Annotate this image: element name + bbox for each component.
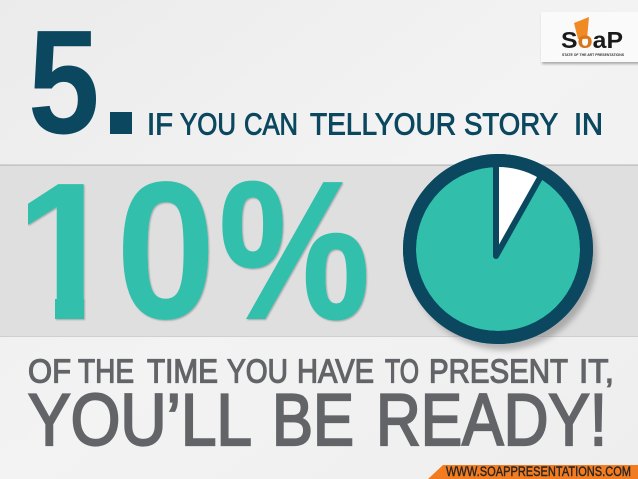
line: of the time you have to present it: OF bbox=[28, 354, 71, 390]
big 10 percent: 0 bbox=[116, 141, 216, 360]
big 10 percent: 1 bbox=[11, 142, 120, 361]
headline: if you can tell your story in: IN bbox=[574, 107, 603, 142]
line: of the time you have to present it: IT, bbox=[579, 354, 614, 390]
big 10 percent: % bbox=[219, 140, 370, 360]
headline: if you can tell your story in: STORY bbox=[464, 107, 558, 142]
line: of the time you have to present it: TO bbox=[385, 354, 419, 390]
line: you'll be ready: YOU’LL bbox=[28, 380, 252, 461]
line: of the time you have to present it: THE bbox=[78, 354, 134, 390]
big number 5: 5 bbox=[28, 0, 100, 165]
line: you'll be ready: BE bbox=[272, 380, 354, 461]
middle band bbox=[0, 164, 638, 337]
headline: if you can tell your story in: YOU bbox=[180, 107, 236, 142]
line: of the time you have to present it: HAVE bbox=[297, 354, 374, 390]
logo wordmark: SoaP bbox=[561, 27, 623, 53]
line: of the time you have to present it: PRESENT bbox=[429, 354, 568, 390]
line: of the time you have to present it: YOU bbox=[227, 354, 288, 390]
logo card bbox=[541, 12, 638, 64]
logo tagline: STATE OF THE ART PRESENTATIONS bbox=[562, 53, 625, 57]
pie chart: 10 percent slice bbox=[409, 160, 597, 350]
white slice bbox=[496, 160, 541, 256]
icon: orange exclamation mark bbox=[574, 17, 589, 39]
line: you'll be ready bbox=[28, 380, 607, 461]
big 10 percent bbox=[28, 180, 368, 322]
square period bbox=[110, 112, 132, 134]
headline: if you can tell your story in: TELLYOUR bbox=[310, 107, 456, 142]
headline: if you can tell your story in bbox=[147, 107, 603, 142]
headline: if you can tell your story in: CAN bbox=[244, 107, 298, 142]
line: of the time you have to present it: TIME bbox=[147, 354, 218, 390]
line: of the time you have to present it bbox=[28, 354, 614, 390]
headline: if you can tell your story in: IF bbox=[147, 107, 173, 142]
